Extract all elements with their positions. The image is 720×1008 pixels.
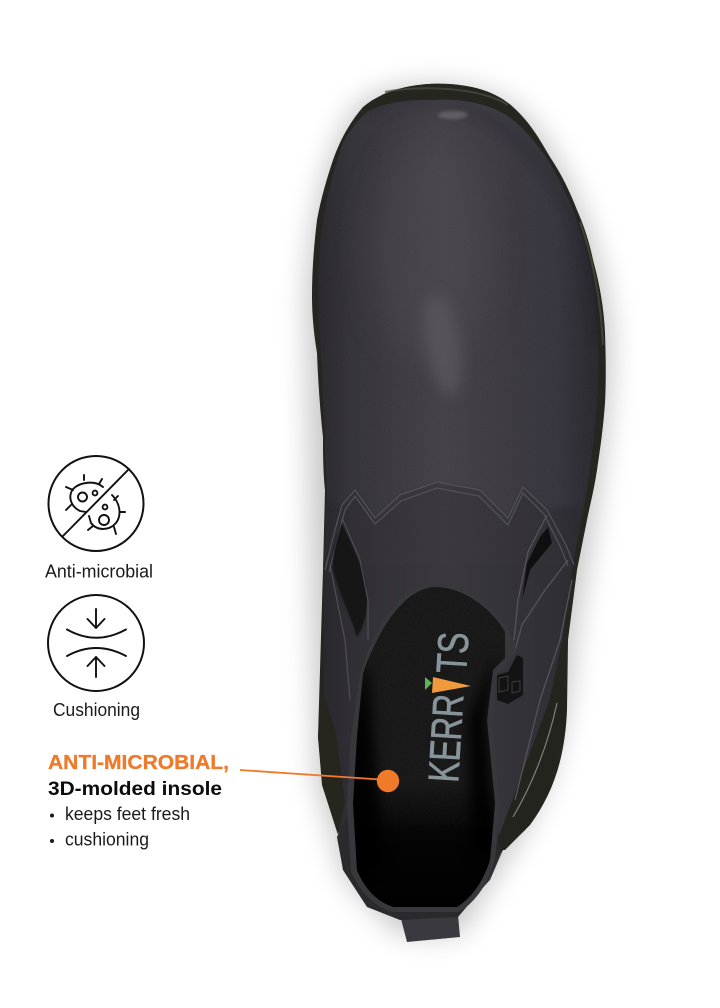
shaft shading xyxy=(338,484,550,883)
bacterium upper xyxy=(66,475,103,512)
toe and vamp leather xyxy=(318,100,598,912)
label: anti-microbial: Anti-microbial xyxy=(45,562,153,582)
collar scallop stitching xyxy=(325,482,574,572)
insole logo xyxy=(420,631,478,784)
bullet list: keeps feet fresh xyxy=(65,804,190,824)
bullet list xyxy=(50,804,190,850)
lower right sole xyxy=(490,680,567,860)
leather grain xyxy=(310,85,610,565)
lower left sole xyxy=(318,690,345,835)
insole grain xyxy=(372,652,444,818)
logo carrot top xyxy=(425,677,432,690)
bullet list: cushioning xyxy=(65,830,149,850)
callout text xyxy=(48,752,229,850)
logo word: KERR: KERR xyxy=(420,693,473,784)
boot soft shadow xyxy=(306,85,612,935)
zipper pull xyxy=(497,655,523,704)
boot photo xyxy=(300,84,612,942)
leather highlights xyxy=(425,300,462,393)
right zipper gore xyxy=(522,527,552,600)
insole xyxy=(345,580,505,915)
outsole xyxy=(312,84,606,850)
callout subheading: 3D-molded insole xyxy=(48,778,222,800)
heel pull tab xyxy=(400,915,460,942)
logo carrot xyxy=(432,677,471,693)
left elastic gore xyxy=(333,523,367,637)
silver welt line xyxy=(513,703,557,817)
icon: cushioning xyxy=(48,595,144,691)
icon: anti-microbial xyxy=(48,456,144,551)
heel collar xyxy=(337,800,500,920)
logo word: TS: TS xyxy=(428,631,478,675)
bacterium lower xyxy=(88,495,125,534)
sole edge highlight xyxy=(385,88,603,345)
toe edge shading xyxy=(367,100,598,340)
label: cushioning: Cushioning xyxy=(53,700,140,720)
insole side shadow xyxy=(353,673,380,873)
callout leader line and dot xyxy=(240,770,399,792)
insole opening rim xyxy=(347,582,517,912)
callout heading: ANTI-MICROBIAL, xyxy=(48,752,229,774)
